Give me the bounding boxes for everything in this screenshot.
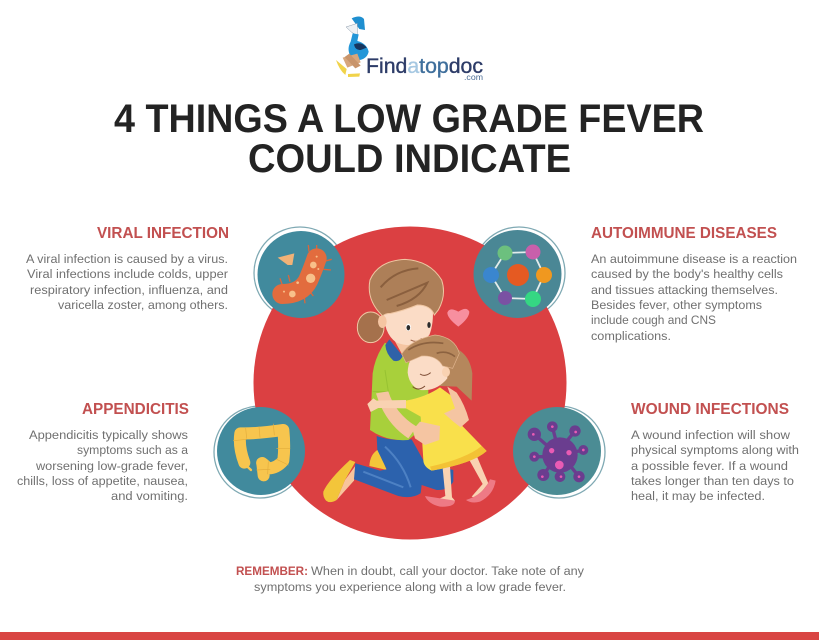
text block: wound infections: takes longer than ten days to [631,474,794,488]
daughter's arm [367,398,406,412]
daughter's legs [437,457,488,501]
intestine segments [233,424,290,474]
mother's yellow shoe [323,460,355,502]
daughter's hair back [438,345,472,401]
logo wordmark: Findatopdoc [366,55,483,78]
mother's face [384,287,433,345]
text block: appendicitis: APPENDICITIS [82,401,189,418]
logo domain suffix: .com [464,73,483,82]
network links [491,252,544,299]
daughter's pink shoes [425,479,496,507]
text block: wound infections: WOUND INFECTIONS [631,401,789,418]
text block: appendicitis: chills, loss of appetite, nausea, [17,474,188,488]
text block: viral infection: varicella zoster, among others. [58,298,228,312]
network nodes [483,244,552,307]
text block: autoimmune diseases [591,225,797,343]
text block: viral infection: VIRAL INFECTION [97,225,229,242]
mother's hair bun [357,312,384,343]
daughter's yellow dress [406,387,487,471]
bacterium body [282,258,317,294]
mother's left hand on dress [413,422,440,445]
icon: bacteria badge [258,231,344,318]
text block: appendicitis: Appendicitis typically shows [29,428,188,442]
title: COULD INDICATE [248,137,571,181]
text block: wound infections [631,401,799,503]
text block: appendicitis: and vomiting. [111,489,188,503]
decorative rings behind the red circle [214,227,605,498]
text block: autoimmune diseases: caused by the body's healthy cells [591,267,783,281]
text block: appendicitis [17,401,189,503]
text block: appendicitis: symptoms such as a [77,443,188,457]
icon: intestine badge [217,407,305,495]
text block: autoimmune diseases: complications. [591,329,671,343]
title: 4 THINGS A LOW GRADE FEVER [114,97,704,141]
mother's right forearm and hand [444,387,469,427]
virus spokes [534,427,583,477]
icon: autoimmune cell network badge [474,230,562,318]
daughter's closed eye and smile [413,373,431,389]
text block: autoimmune diseases: An autoimmune disease is a reaction [591,252,797,266]
icon: bird mascot [336,16,369,77]
illustration: mother hugging daughter [323,259,496,507]
callout: remember note: REMEMBER: [236,564,308,578]
text block: viral infection [26,225,229,312]
text block: autoimmune diseases: AUTOIMMUNE DISEASES [591,225,777,242]
daughter's fringe [402,335,459,368]
bacterium spots [283,256,319,297]
text block: autoimmune diseases: Besides fever, other symptoms [591,298,762,312]
mother's jeans [354,436,453,497]
daughter's ear [442,367,450,377]
text block: wound infections: a possible fever. If a wound [631,459,788,473]
footer bar [0,632,819,640]
callout: remember note: When in doubt, call your doctor. Take note of any [311,564,585,578]
text block: wound infections: heal, it may be infected. [631,489,765,503]
text block: wound infections: physical symptoms along with [631,443,799,457]
mother's forearm [376,391,417,438]
mother's collar [385,339,403,361]
text block: viral infection: Viral infections include colds, upper [27,267,228,281]
bacterium spikes [280,245,332,303]
mother's hair [369,259,444,316]
panel: central red circle [254,226,566,540]
text block: viral infection: A viral infection is caused by a virus. [26,252,228,266]
virus body [528,421,588,482]
text block: autoimmune diseases: and tissues attacking themselves. [591,283,778,297]
large intestine [240,430,284,475]
text block: wound infections: A wound infection will show [631,428,790,442]
text block: viral infection: respiratory infection, influenza, and [30,283,228,297]
intestine tail [246,465,251,470]
icon: virus cluster badge [513,407,601,495]
daughter's face [408,348,447,390]
heart [447,309,469,327]
logo: Findatopdoc [336,16,483,82]
small microbe [278,253,294,265]
mother's ear [378,315,387,328]
mother's bare foot [337,465,356,500]
text block: appendicitis: worsening low-grade fever, [35,459,188,473]
virus spots [532,425,585,478]
mother's neck [393,338,412,357]
mother's back foot [369,449,387,470]
callout: remember note: symptoms you experience along with a low grade fever. [254,580,566,594]
mother's green shirt [370,343,428,440]
text block: autoimmune diseases: include cough and CNS [591,313,716,327]
callout: remember note [236,564,585,594]
mother's eyes and smile [406,322,431,341]
title [114,97,704,181]
